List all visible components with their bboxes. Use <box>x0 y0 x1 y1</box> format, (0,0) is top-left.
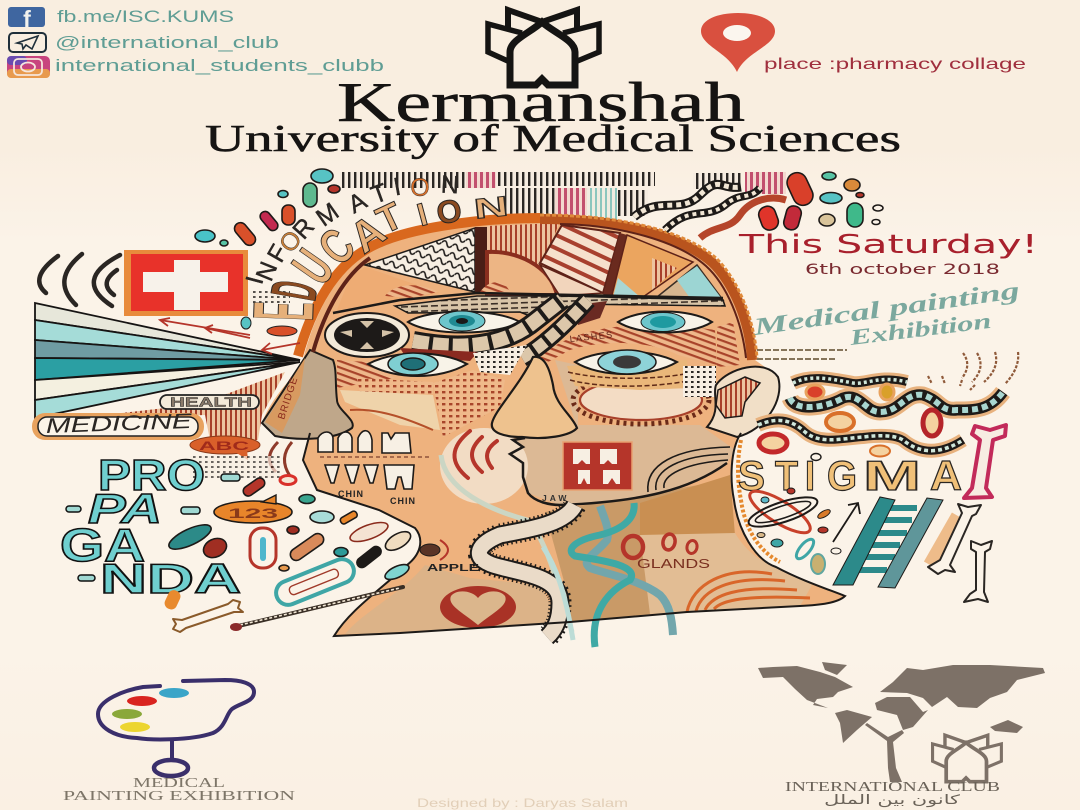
social links <box>7 6 384 78</box>
information text: N <box>251 258 283 285</box>
eye 4 <box>575 350 677 374</box>
icon: wheel <box>325 313 409 357</box>
information text: I <box>391 173 403 201</box>
icon: white bone <box>928 504 981 574</box>
bar between panels <box>603 233 627 296</box>
exhibition label: PAINTING EXHIBITION <box>63 789 295 804</box>
heart area shading <box>345 565 560 634</box>
neck tan <box>545 480 734 622</box>
arabic label: كانون بين الملل <box>824 793 961 808</box>
brow band <box>395 296 725 320</box>
forehead panel: stripes over arch <box>487 223 559 293</box>
education text: I <box>413 196 431 233</box>
instagram handle: international_students_clubb <box>55 57 384 75</box>
icon: small arcs <box>269 442 292 476</box>
icon: paperclip <box>744 484 820 540</box>
forehead panel: teal <box>657 265 723 300</box>
orange panel stripes <box>652 258 677 290</box>
eye 1 <box>408 311 520 332</box>
stigma text: T <box>775 452 798 499</box>
lash arcs <box>540 325 717 365</box>
jaw tooth square <box>563 442 632 490</box>
title <box>205 72 901 160</box>
education text: D <box>258 276 332 305</box>
cheek line <box>350 410 433 430</box>
arrows <box>160 318 300 354</box>
top right pills <box>784 169 816 209</box>
neck arcs <box>687 572 810 612</box>
eye 2 <box>368 353 467 376</box>
health label: HEALTH <box>170 394 252 410</box>
stigma text: M <box>863 452 921 499</box>
orange panel teal <box>613 278 640 297</box>
stigma text: I <box>805 452 815 499</box>
123 bubble: 123 <box>228 505 278 521</box>
icon: ladder <box>833 497 943 588</box>
information text: I <box>241 273 269 287</box>
glands: GLANDS <box>637 556 710 571</box>
forehead panel: orange left <box>337 267 440 310</box>
health label <box>160 394 259 410</box>
propaganda text: GA <box>60 519 145 571</box>
icon: bottom bone <box>173 600 243 632</box>
illustration: head <box>262 215 845 647</box>
chin and neck line <box>303 433 845 636</box>
cheek dots panel <box>433 370 505 437</box>
forehead bar <box>475 227 487 293</box>
left nose <box>262 350 353 439</box>
stigma text <box>738 452 962 499</box>
cheek circle <box>573 376 709 424</box>
teal ribbons <box>543 503 673 647</box>
apple: APPLE <box>427 563 480 574</box>
head base <box>262 217 845 636</box>
icon: facebook <box>8 6 45 32</box>
information text: N <box>440 171 460 199</box>
winding tube <box>479 505 575 637</box>
icon: telegram <box>9 33 46 52</box>
capsule near arrows <box>267 326 297 336</box>
propaganda text: PRO <box>98 451 205 500</box>
icon: instagram <box>7 56 50 78</box>
right serpents <box>758 378 1003 451</box>
outline inner right <box>560 224 746 358</box>
icon: sound arcs <box>454 431 497 478</box>
forehead panel: red stripes <box>540 225 620 293</box>
teal patch <box>677 266 722 299</box>
icon: small ripple marks <box>928 352 1018 390</box>
medical painting exhibition: Medical painting <box>751 278 1021 341</box>
striped lower beam area <box>60 372 285 440</box>
stigma text: S <box>738 452 765 499</box>
this saturday: This Saturday! <box>737 230 1038 260</box>
education text: U <box>280 239 347 296</box>
icon: signal arcs <box>39 254 120 306</box>
dots row <box>357 378 433 394</box>
outline right dashes <box>540 215 757 358</box>
propaganda hyphens <box>66 474 240 581</box>
title: University of Medical Sciences <box>205 118 901 160</box>
forehead arch <box>487 252 557 295</box>
right profile line <box>510 438 727 505</box>
red stripes left <box>337 360 395 388</box>
telegram handle: @international_club <box>55 34 279 52</box>
date: 6th october 2018 <box>805 262 1000 278</box>
abc bubble <box>190 436 260 460</box>
neck brown band <box>640 475 735 535</box>
title: Kermanshah <box>337 72 745 134</box>
right nose <box>492 357 577 438</box>
icon: small university logo <box>933 735 1001 782</box>
exhibition label <box>63 776 295 804</box>
propaganda text: NDA <box>100 555 241 602</box>
information text: R <box>287 213 320 245</box>
dashed lines near ear <box>757 350 847 359</box>
jaw arcs <box>648 447 730 492</box>
black dots <box>473 345 527 375</box>
left nose: BRIDGE <box>276 375 301 421</box>
education text: N <box>472 191 510 225</box>
icon: heart <box>440 586 516 628</box>
information text <box>241 171 460 287</box>
jaw fill <box>513 360 735 505</box>
skull teeth <box>318 431 432 489</box>
neck dashes <box>738 440 780 562</box>
propaganda text <box>60 451 241 602</box>
lashes label: LASHES <box>569 329 614 344</box>
education text: T <box>370 195 409 243</box>
mouth circle <box>440 428 528 504</box>
icon: red cross <box>124 250 248 316</box>
dotted edu block <box>250 291 290 303</box>
dark temple <box>577 301 607 325</box>
icon: world map tree <box>758 662 1045 782</box>
medical painting exhibition: Exhibition <box>847 308 993 350</box>
small dots right <box>757 488 841 574</box>
dotted block <box>190 456 280 478</box>
medical painting logo <box>63 680 295 804</box>
information text: M <box>311 197 344 232</box>
teal capsule near arrows <box>241 317 251 329</box>
squiggles top <box>634 184 786 238</box>
abc bubble: ABC <box>199 439 250 453</box>
thermometer <box>230 587 403 631</box>
lower-left pills <box>241 476 267 498</box>
stigma text: A <box>930 452 962 499</box>
education text: E <box>235 300 332 322</box>
cheek left <box>340 390 440 430</box>
stigma text: G <box>827 452 857 499</box>
icon: small bone <box>964 541 992 602</box>
under-eye <box>567 360 690 390</box>
neck light band <box>640 533 812 614</box>
forehead panel: brain <box>365 228 475 292</box>
arch small arcs <box>480 282 510 292</box>
information text: T <box>367 178 391 210</box>
eye 3 <box>618 312 712 332</box>
under-eye dashes <box>568 372 688 386</box>
temple stripes <box>717 322 740 367</box>
propaganda text: PA <box>88 485 162 532</box>
chin label 1: CHIN <box>338 489 364 499</box>
info beam <box>35 303 300 418</box>
education text: O <box>434 192 464 231</box>
film strip <box>413 300 588 358</box>
forehead panel: orange right <box>612 235 693 297</box>
exhibition label: MEDICAL <box>133 776 225 791</box>
place text: place :pharmacy collage <box>764 56 1026 73</box>
right ovals <box>759 384 941 460</box>
icon: stethoscope palette <box>98 680 254 776</box>
medicine label: MEDICINE <box>45 410 193 438</box>
medical painting exhibition <box>751 278 1021 350</box>
icon: arrow <box>833 503 860 542</box>
forehead arcs left <box>385 285 438 298</box>
designed by credit: Designed by : Daryas Salam <box>417 796 628 810</box>
dark red under strip <box>400 348 478 361</box>
forehead panel: stripes lower <box>540 265 603 296</box>
medicine label <box>32 410 204 440</box>
information text: F <box>262 240 294 267</box>
pale teal wash <box>441 455 572 632</box>
chin label 2: CHIN <box>390 496 416 506</box>
icon: pink bone <box>964 425 1006 498</box>
icon: university logo <box>488 10 599 85</box>
outline right <box>540 219 752 360</box>
jaw label: JAW <box>542 493 569 503</box>
facebook link: fb.me/ISC.KUMS <box>57 8 234 26</box>
pills and dots <box>164 169 883 610</box>
top pills <box>311 169 333 183</box>
brow outline <box>333 293 723 313</box>
ear <box>707 367 779 437</box>
information text: O <box>410 174 430 202</box>
information text: A <box>344 186 372 219</box>
information text: O <box>274 225 308 258</box>
ear dots <box>683 366 716 397</box>
glands <box>623 533 710 571</box>
education text <box>235 191 510 322</box>
outline left inner <box>313 258 370 352</box>
club label: INTERNATIONAL CLUB <box>785 780 1000 795</box>
icon: location pin <box>701 13 775 72</box>
icon: facebook: f <box>23 6 31 32</box>
123 bubble <box>214 495 292 523</box>
education text: C <box>309 219 366 276</box>
apple <box>420 540 480 574</box>
international club logo <box>758 662 1045 808</box>
outline left <box>298 218 540 356</box>
education text: A <box>341 206 394 263</box>
illustration: top hatching <box>340 172 786 220</box>
